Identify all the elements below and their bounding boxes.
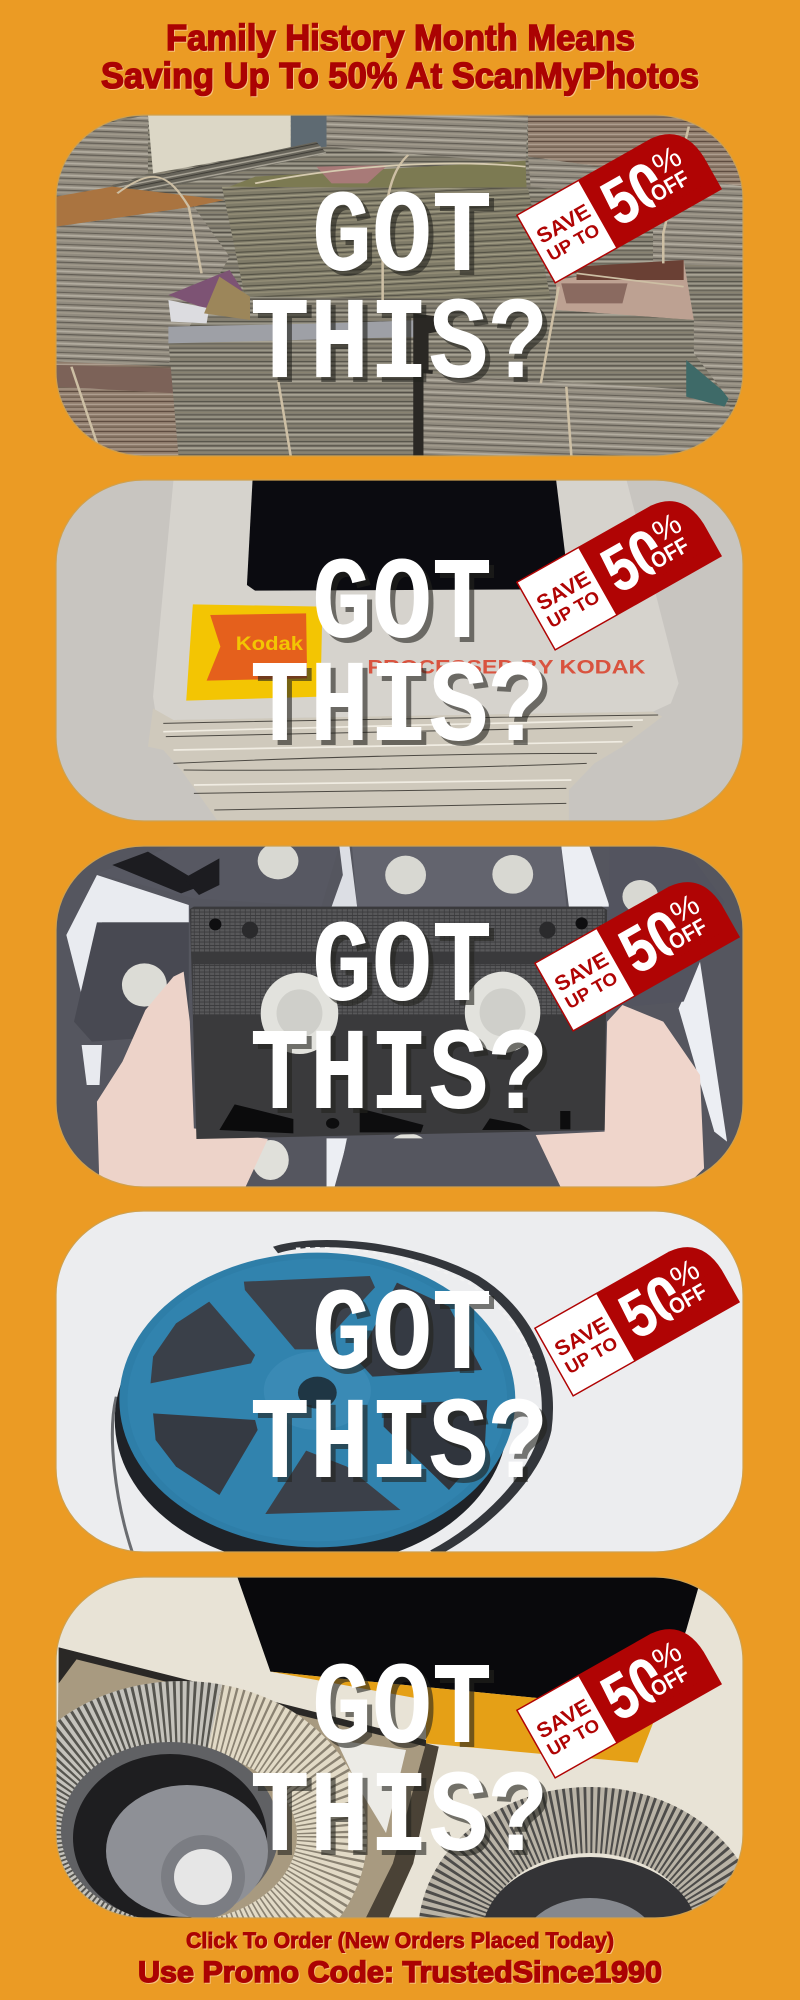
badge: save up to 50% off: OFF <box>646 1660 693 1702</box>
panel: VHS tapes <box>56 843 745 1188</box>
panel outline <box>56 115 743 456</box>
badge: save up to 50% off: 50 <box>608 1260 695 1352</box>
badge: save up to 50% off: 50 <box>590 1642 677 1734</box>
badge: save up to 50% off: UP TO <box>544 220 603 265</box>
headline: GOT <box>312 904 492 1036</box>
photo: stack of Kodak slides: Kodak <box>236 633 303 655</box>
headline <box>250 1272 548 1513</box>
photo: stack of Kodak slides <box>56 480 745 823</box>
call to action <box>138 1928 662 1989</box>
badge: save up to 50% off: 50 <box>590 514 677 606</box>
panel: stacks of photos <box>56 115 745 457</box>
badge: save up to 50% off: UP TO <box>562 1333 621 1378</box>
headline: GOT <box>312 1646 492 1778</box>
badge: save up to 50% off <box>516 487 722 651</box>
badge: save up to 50% off: 50 <box>590 147 677 239</box>
photo: blue film reel <box>56 1210 745 1567</box>
panel: mounted Kodak slides <box>56 480 745 823</box>
badge: save up to 50% off: % <box>665 888 705 930</box>
headline <box>250 1646 548 1886</box>
badge: save up to 50% off: SAVE <box>533 200 595 248</box>
title <box>101 17 699 96</box>
headline: THIS? <box>250 281 548 413</box>
headline: THIS? <box>250 1754 548 1886</box>
panel outline <box>56 1577 743 1918</box>
headline <box>250 541 548 776</box>
title: Saving Up To 50% At ScanMyPhotos <box>101 55 699 96</box>
panel: blue film reel <box>56 1210 745 1567</box>
panel outline <box>56 846 743 1187</box>
badge: save up to 50% off <box>516 1615 722 1779</box>
badge: save up to 50% off: SAVE <box>551 1313 613 1361</box>
photo: stacks of printed photos <box>56 115 745 457</box>
badge: save up to 50% off: UP TO <box>544 587 603 632</box>
headline <box>250 174 548 413</box>
badge: save up to 50% off: SAVE <box>551 948 613 996</box>
photo: hands holding a VHS cassette <box>56 843 745 1188</box>
panel outline <box>56 480 743 821</box>
badge: save up to 50% off: OFF <box>664 1278 711 1320</box>
badge: save up to 50% off: % <box>647 140 687 182</box>
headline: THIS? <box>250 1012 548 1144</box>
badge: save up to 50% off <box>516 120 722 284</box>
headline: GOT <box>312 541 492 673</box>
headline: THIS? <box>250 644 548 776</box>
badge: save up to 50% off: UP TO <box>544 1715 603 1760</box>
badge: save up to 50% off: SAVE <box>533 567 595 615</box>
panel outline <box>56 1211 743 1552</box>
panel: slide carousels <box>56 1576 744 1919</box>
headline: GOT <box>312 174 492 306</box>
icon: right carousel <box>419 1787 738 1918</box>
icon: left carousel <box>32 1716 332 1956</box>
photo: slide carousel trays <box>56 1578 742 1918</box>
badge: save up to 50% off <box>534 1233 740 1397</box>
call to action: Use Promo Code: TrustedSince1990 <box>138 1956 662 1989</box>
foam packing <box>337 1742 406 1833</box>
badge: save up to 50% off: OFF <box>646 532 693 574</box>
badge: save up to 50% off: UP TO <box>562 968 621 1013</box>
badge: save up to 50% off: % <box>665 1253 705 1295</box>
title: Family History Month Means <box>166 17 635 58</box>
badge: save up to 50% off: SAVE <box>533 1695 595 1743</box>
photo: stack of Kodak slides: PROCESSED BY KODAK <box>367 656 645 678</box>
badge: save up to 50% off: % <box>647 507 687 549</box>
call to action: Click To Order (New Orders Placed Today) <box>186 1928 614 1953</box>
headline: GOT <box>312 1272 492 1404</box>
headline: THIS? <box>250 1381 548 1513</box>
badge: save up to 50% off <box>534 868 740 1032</box>
badge: save up to 50% off: 50 <box>608 895 695 987</box>
headline <box>250 904 548 1144</box>
badge: save up to 50% off: OFF <box>664 913 711 955</box>
badge: save up to 50% off: % <box>647 1635 687 1677</box>
badge: save up to 50% off: OFF <box>646 165 693 207</box>
